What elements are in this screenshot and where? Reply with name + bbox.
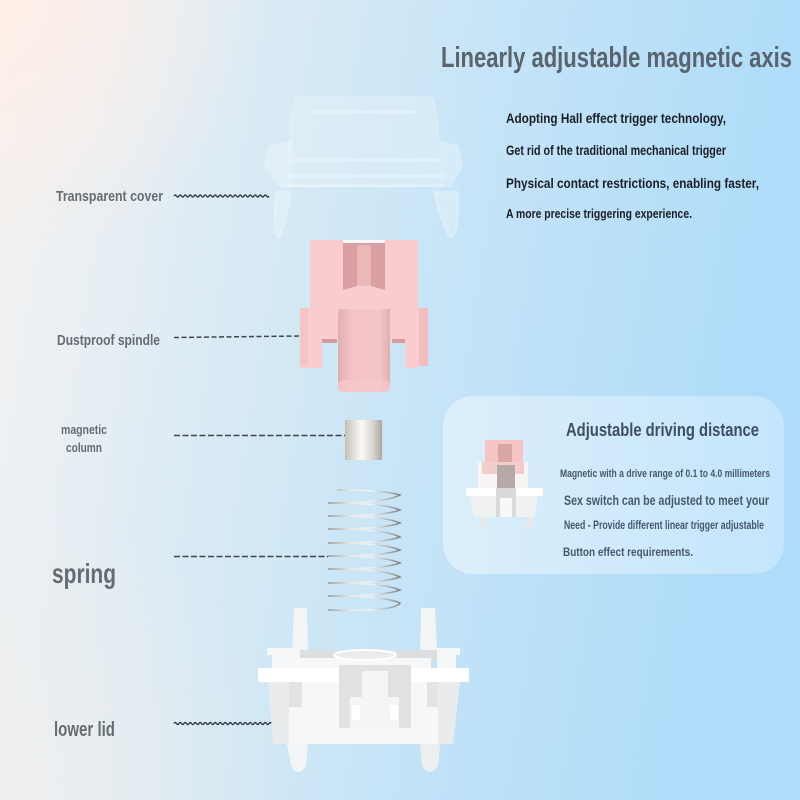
label: magnetic column xyxy=(61,422,345,455)
intro text block xyxy=(506,110,759,221)
label: dustproof spindle: Dustproof spindle xyxy=(57,332,160,349)
label: spring: spring xyxy=(52,558,116,589)
label: magnetic column: column xyxy=(66,440,102,455)
icon: assembled switch xyxy=(466,440,543,528)
intro text block: A more precise triggering experience. xyxy=(506,206,692,221)
icon: transparent cover xyxy=(265,97,462,238)
label: transparent cover: Transparent cover xyxy=(56,188,163,205)
panel heading: Adjustable driving distance xyxy=(566,420,759,440)
icon: dustproof spindle xyxy=(300,240,428,392)
icon: spring xyxy=(328,490,400,610)
intro text block: Physical contact restrictions, enabling faster, xyxy=(506,175,759,191)
panel text block: Button effect requirements. xyxy=(563,545,693,559)
label: lower lid: lower lid xyxy=(54,719,115,741)
icon: lower lid xyxy=(258,608,469,772)
intro text block: Get rid of the traditional mechanical trigger xyxy=(506,142,726,158)
panel text block xyxy=(560,468,770,559)
icon: magnetic column xyxy=(345,420,382,460)
intro text block: Adopting Hall effect trigger technology, xyxy=(506,110,726,126)
panel: adjustable driving distance xyxy=(443,396,784,574)
label: magnetic column: magnetic xyxy=(61,422,107,437)
